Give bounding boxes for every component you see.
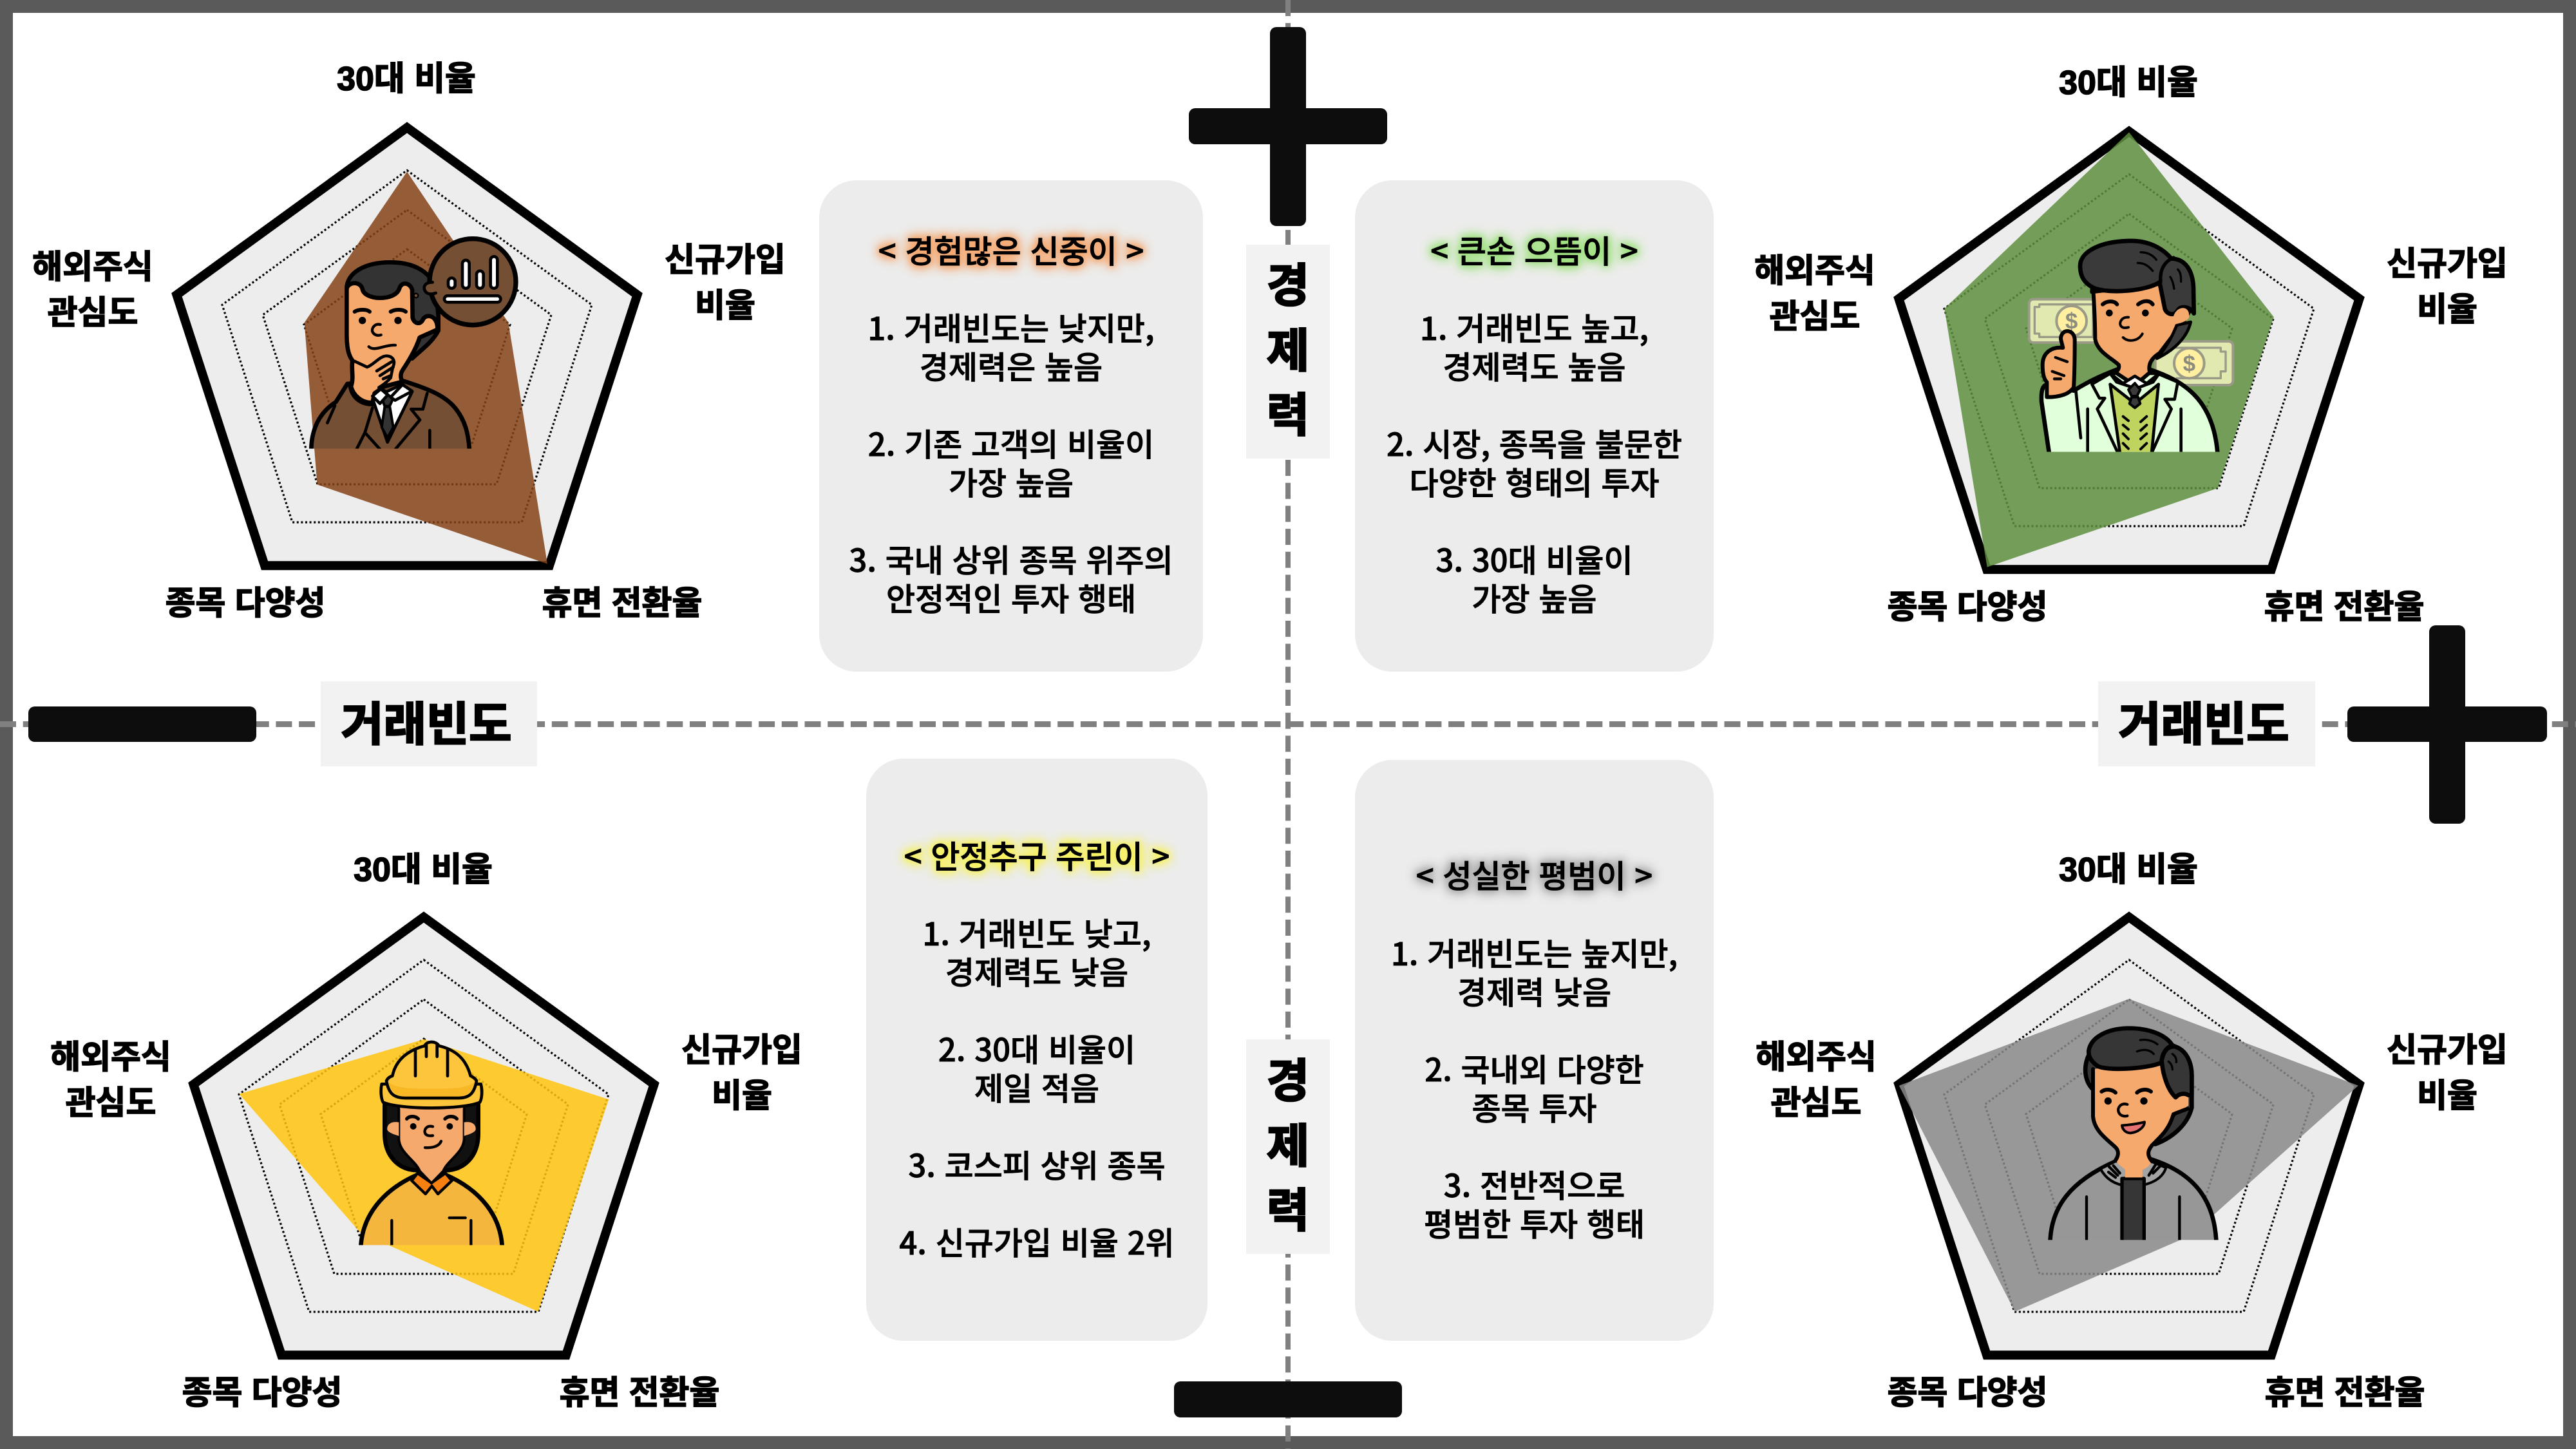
radar data: green: [1944, 132, 2274, 567]
radar data: yellow: [240, 1039, 609, 1312]
axis label: top economic power: 경: [1267, 261, 1309, 312]
character: smiling man in gray cardigan: [2050, 1028, 2217, 1245]
card text: 2. 30대 비율이: [938, 1025, 1135, 1071]
radar labels: 30대 비율: [354, 851, 493, 889]
panel: card big-handed leader: [1355, 180, 1714, 672]
character: thumbs-up investor with banknotes: [2029, 241, 2233, 459]
character: thumbs-up investor with banknotes: $: [2183, 351, 2195, 376]
card text: [899, 909, 1175, 1264]
panel: radar chart top right: [1754, 64, 2508, 625]
card title: < 성실한 평범이 >: [1416, 851, 1653, 897]
card text: 2. 시장, 종목을 불문한: [1387, 420, 1682, 466]
radar labels: [1754, 64, 2508, 625]
card text: 경제력 낮음: [1457, 968, 1611, 1014]
radar labels: 종목 다양성: [1888, 1374, 2047, 1411]
minus sign: bottom of economic power axis: [1174, 1381, 1402, 1417]
plus sign: top of economic power axis: [1189, 27, 1387, 226]
radar grid: [193, 917, 654, 1355]
radar labels: 해외주식: [50, 1039, 171, 1075]
card text: 2. 기존 고객의 비율이: [868, 420, 1154, 466]
card text: 가장 높음: [1472, 574, 1597, 620]
radar labels: 30대 비율: [2059, 851, 2198, 889]
radar labels: 휴면 전환율: [2264, 589, 2424, 625]
card text: 1. 거래빈도는 낮지만,: [867, 304, 1155, 350]
radar labels: 종목 다양성: [1888, 589, 2047, 625]
horizontal axis line: [0, 721, 2576, 727]
radar labels: 30대 비율: [2059, 64, 2198, 102]
card text: 경제력은 높음: [920, 343, 1103, 388]
card text: 3. 국내 상위 종목 위주의: [849, 536, 1173, 582]
axis label: bottom economic power: [1246, 1039, 1330, 1254]
radar labels: [50, 851, 802, 1411]
card text: 3. 코스피 상위 종목: [908, 1141, 1166, 1187]
vertical axis line: [1285, 0, 1291, 1449]
radar labels: 30대 비율: [337, 61, 476, 98]
card text: 1. 거래빈도는 높지만,: [1391, 929, 1678, 975]
radar labels: 관심도: [1771, 1084, 1861, 1121]
panel: radar chart bottom right: [1756, 851, 2508, 1411]
radar labels: 해외주식: [32, 249, 153, 285]
radar labels: 관심도: [66, 1084, 156, 1121]
card text: 1. 거래빈도 높고,: [1420, 304, 1649, 350]
character: thinking investor in brown suit: [311, 239, 516, 455]
radar grid: [1899, 131, 2360, 569]
panel: card diligent average investor: [1355, 760, 1714, 1341]
panel: radar chart bottom left: [50, 851, 802, 1411]
axis label: top economic power: 력: [1267, 390, 1309, 442]
card text: 가장 높음: [949, 459, 1074, 504]
radar labels: 비율: [712, 1077, 772, 1114]
card text: 경제력도 높음: [1443, 343, 1626, 388]
card title: < 안정추구 주린이 >: [904, 832, 1170, 878]
radar labels: 해외주식: [1754, 252, 1875, 289]
card text: 안정적인 투자 행태: [886, 574, 1136, 620]
card text: 평범한 투자 행태: [1424, 1200, 1645, 1245]
radar grid: [176, 128, 638, 565]
radar labels: [32, 61, 786, 621]
axis label: right trade frequency: [2098, 681, 2315, 766]
radar labels: 해외주식: [1756, 1039, 1877, 1075]
radar labels: 휴면 전환율: [542, 585, 702, 621]
radar labels: 관심도: [1770, 298, 1860, 335]
radar labels: 신규가입: [665, 242, 786, 278]
axis label: left trade frequency: [321, 681, 537, 766]
radar labels: 종목 다양성: [182, 1374, 342, 1411]
card text: 제일 적음: [974, 1064, 1099, 1110]
card text: 2. 국내외 다양한: [1425, 1045, 1644, 1091]
axis label: bottom economic power: 경: [1267, 1056, 1309, 1108]
panel: card stability-seeking beginner: [866, 759, 1208, 1341]
axis label: left trade frequency: 거래빈도: [341, 699, 511, 751]
card text: 3. 30대 비율이: [1435, 536, 1633, 582]
axis label: top economic power: 제: [1267, 326, 1309, 377]
radar labels: 신규가입: [681, 1032, 802, 1068]
card text: 3. 전반적으로: [1444, 1161, 1625, 1207]
character: woman with yellow hard hat: [361, 1042, 502, 1251]
axis label: right trade frequency: 거래빈도: [2119, 699, 2289, 751]
radar labels: 관심도: [48, 294, 138, 331]
card text: 종목 투자: [1472, 1084, 1597, 1130]
character: thumbs-up investor with banknotes: $: [2065, 309, 2078, 334]
card text: 4. 신규가입 비율 2위: [899, 1218, 1175, 1264]
card text: 경제력도 낮음: [945, 948, 1128, 994]
card text: 다양한 형태의 투자: [1409, 459, 1660, 504]
axis label: bottom economic power: 력: [1267, 1186, 1309, 1237]
panel: card experienced cautious investor: [819, 180, 1203, 672]
radar labels: 비율: [2417, 291, 2477, 328]
card title: < 큰손 으뜸이 >: [1430, 227, 1638, 272]
radar labels: 신규가입: [2387, 245, 2508, 282]
card text: [849, 304, 1173, 620]
panel: radar chart top left: [32, 61, 786, 621]
radar labels: 휴면 전환율: [2265, 1374, 2425, 1411]
radar data: gray: [1899, 999, 2358, 1312]
card title: < 경험많은 신중이 >: [878, 227, 1144, 272]
radar labels: [1756, 851, 2508, 1411]
card text: [1387, 304, 1682, 620]
radar labels: 비율: [695, 287, 755, 324]
radar labels: 신규가입: [2387, 1032, 2508, 1068]
axis label: bottom economic power: 제: [1267, 1121, 1309, 1173]
minus sign: left of trade frequency axis: [28, 706, 256, 742]
card text: 1. 거래빈도 낮고,: [922, 909, 1151, 955]
radar labels: 휴면 전환율: [560, 1374, 719, 1411]
card text: [1391, 929, 1678, 1245]
radar grid: [1899, 917, 2360, 1355]
radar labels: 비율: [2417, 1077, 2477, 1114]
plus sign: right of trade frequency axis: [2347, 625, 2547, 824]
radar data: brown: [305, 172, 547, 564]
radar labels: 종목 다양성: [166, 585, 325, 621]
axis label: top economic power: [1246, 245, 1330, 459]
